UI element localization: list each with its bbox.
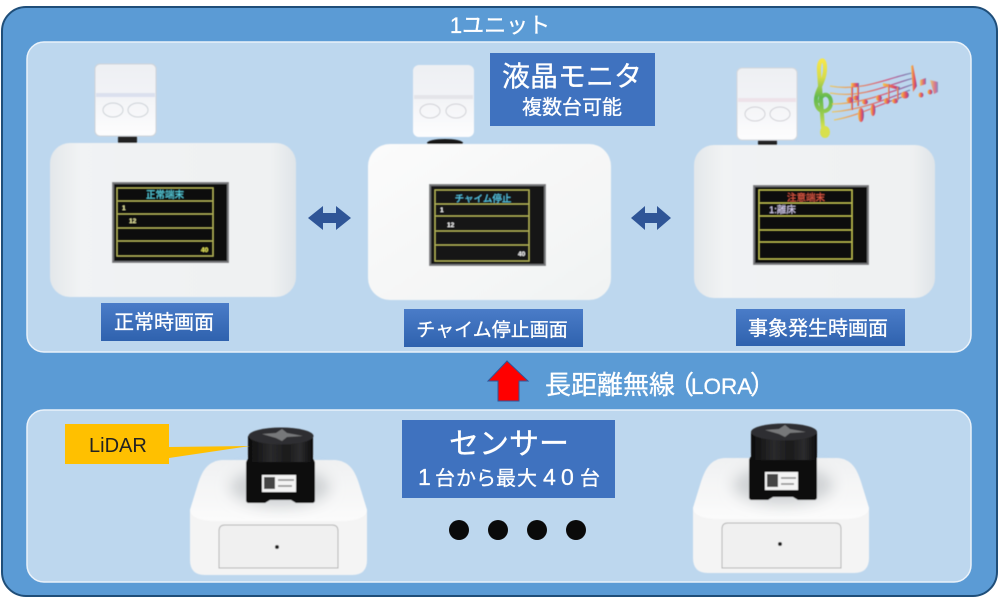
- callout: LiDAR: LiDAR: [89, 435, 147, 457]
- monitor: normal screen: [50, 64, 296, 297]
- monitor: normal screen: 12: [129, 218, 137, 225]
- text: wireless: ）: [750, 370, 776, 400]
- monitor: event screen: 注意端末: [787, 192, 825, 204]
- monitor: chime stop screen: 1: [440, 207, 444, 214]
- monitor: event screen: 1:離床: [769, 204, 796, 216]
- monitor: normal screen: 正常端末: [146, 189, 184, 201]
- panel: sensors: [27, 410, 971, 582]
- monitor: chime stop screen: 40: [518, 251, 526, 258]
- monitor: chime stop screen: チャイム停止: [455, 193, 512, 205]
- sensor device right: [693, 424, 869, 573]
- arrow: double left: [308, 206, 351, 230]
- monitor: chime stop screen: [368, 65, 611, 300]
- label: event screen: 事象発生時画面: [748, 317, 888, 340]
- text: wireless: （: [668, 370, 694, 400]
- title box: sensor: [402, 420, 615, 498]
- title box: LCD monitor: 複数台可能: [522, 96, 622, 119]
- title box: sensor: 1: [418, 464, 431, 490]
- monitor: normal screen: 40: [201, 247, 209, 254]
- text: wireless: LORA: [691, 374, 752, 399]
- monitor: normal screen: 1: [122, 205, 126, 212]
- text: wireless: 長距離無線: [545, 370, 675, 400]
- title box: LCD monitor: [490, 53, 655, 126]
- label: chime stop screen: [404, 309, 583, 347]
- ellipsis dots: [449, 520, 586, 540]
- callout: LiDAR: [65, 424, 250, 464]
- title box: sensor: 台: [580, 467, 600, 490]
- label: normal screen: [101, 303, 229, 341]
- arrow: double right: [631, 206, 671, 230]
- panel: monitors: [27, 42, 971, 352]
- icon: music notes: [816, 60, 938, 138]
- title box: LCD monitor: 液晶モニタ: [502, 61, 642, 92]
- title box: sensor: 台から最大: [435, 467, 537, 490]
- label: event screen: [736, 309, 905, 346]
- label: chime stop screen: チャイム停止画面: [416, 319, 568, 341]
- title: 1ユニット: [450, 13, 550, 38]
- title box: sensor: センサー: [449, 428, 569, 461]
- label: normal screen: 正常時画面: [114, 311, 214, 334]
- monitor: event screen: [694, 68, 935, 298]
- monitor: chime stop screen: 12: [447, 222, 455, 229]
- sensor device left: [190, 428, 367, 575]
- arrow: wireless up: [488, 361, 528, 401]
- title box: sensor: 40: [543, 464, 574, 490]
